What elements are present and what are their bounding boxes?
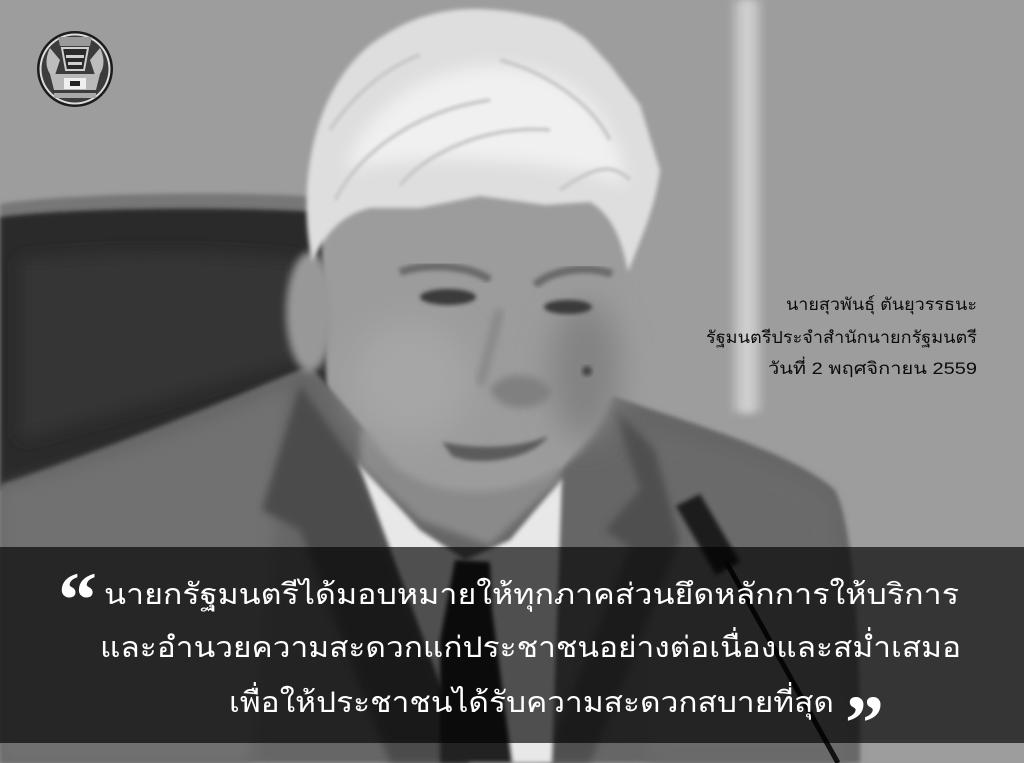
- photo: face: [329, 181, 631, 492]
- nose: [490, 375, 552, 408]
- caption: name, position and date: [706, 295, 977, 378]
- photo: white hair: [307, 9, 660, 272]
- caption line: name: นายสุวพันธุ์ ตันยุวรรธนะ: [786, 295, 977, 315]
- photo: neck: [360, 430, 560, 545]
- photo: microphone: [676, 494, 838, 763]
- eyes: [420, 289, 476, 305]
- brows: [400, 266, 490, 280]
- caption line: position: รัฐมนตรีประจำสำนักนายกรัฐมนตรี: [706, 328, 977, 348]
- photo: suit jacket: [0, 365, 860, 763]
- photo: shirt and tie: [358, 462, 562, 763]
- quote band: [0, 547, 1024, 763]
- mouth: [442, 436, 548, 461]
- mole: [582, 366, 592, 376]
- emblem: Office of the Prime Minister seal: [37, 31, 113, 107]
- opening quotation mark: “: [58, 556, 97, 643]
- photo: office chair: [0, 193, 330, 500]
- wall pillar stripe: [733, 0, 761, 412]
- quote line 3: เพื่อให้ประชาชนได้รับความสะดวกสบายที่สุด: [229, 682, 834, 720]
- caption line: date: วันที่ 2 พฤศจิกายน 2559: [768, 356, 977, 378]
- quote line 1: นายกรัฐมนตรีได้มอบหมายให้ทุกภาคส่วนยึดหลักการให้บริการ: [104, 577, 959, 612]
- quote line 2: และอำนวยความสะดวกแก่ประชาชนอย่างต่อเนื่องและสม่ำเสมอ: [100, 627, 961, 664]
- photo: ear: [286, 252, 334, 372]
